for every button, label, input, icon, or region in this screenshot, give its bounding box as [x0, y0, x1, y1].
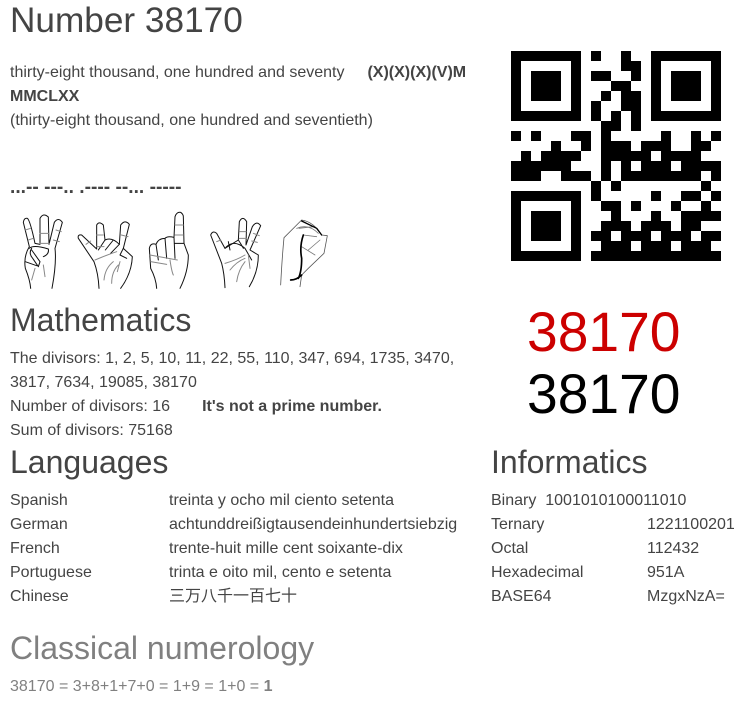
- hand sign: 3: [23, 215, 62, 288]
- informatics table: 112432: [647, 540, 699, 557]
- heading: Languages: Languages: [10, 444, 168, 480]
- informatics table: [491, 492, 735, 605]
- morse code: ...-- ---.. .---- --... -----: [10, 177, 182, 198]
- number in words and roman numeral: MMCLXX: [10, 88, 79, 105]
- languages table: Portuguese: [10, 564, 92, 581]
- hand sign: 0: [281, 220, 327, 287]
- languages table: [10, 492, 457, 605]
- informatics table: Hexadecimal: [491, 564, 583, 581]
- mathematics text: The divisors: 1, 2, 5, 10, 11, 22, 55, 110, 347, 694, 1735, 3470,: [10, 350, 454, 367]
- informatics table: Ternary: [491, 516, 544, 533]
- title: Number 38170: [10, 1, 243, 40]
- mathematics text: Number of divisors: 16 It's not a prime number.: [10, 398, 382, 415]
- sign language hands: [22, 212, 328, 289]
- mathematics text: Sum of divisors: 75168: [10, 422, 173, 439]
- informatics table: Binary 1001010100011010: [491, 492, 686, 509]
- hand sign: 1: [149, 212, 188, 288]
- heading: Classical numerology: Classical numerology: [10, 630, 314, 666]
- languages table: treinta y ocho mil ciento setenta: [169, 492, 394, 509]
- languages table: Spanish: [10, 492, 68, 509]
- heading: Mathematics: Mathematics: [10, 302, 191, 338]
- number in words and roman numeral: thirty-eight thousand, one hundred and seventy (X)(X)(X)(V)M: [10, 64, 466, 81]
- number in red: 38170: [527, 301, 680, 363]
- informatics table: BASE64: [491, 588, 551, 605]
- QR code: [511, 51, 721, 261]
- languages table: Chinese: [10, 588, 69, 605]
- languages table: German: [10, 516, 68, 533]
- hand sign: 7: [211, 218, 261, 288]
- languages table: French: [10, 540, 60, 557]
- numerology calculation: 38170 = 3+8+1+7+0 = 1+9 = 1+0 = 1: [10, 678, 272, 695]
- informatics table: Octal: [491, 540, 528, 557]
- hand sign: 8: [78, 222, 132, 288]
- number in words and roman numeral: [10, 64, 466, 129]
- heading: Informatics: Informatics: [491, 444, 647, 480]
- mathematics text: [10, 350, 454, 439]
- languages table: 三万八千一百七十: [169, 588, 297, 605]
- mathematics text: 3817, 7634, 19085, 38170: [10, 374, 197, 391]
- informatics table: 951A: [647, 564, 684, 581]
- number in words and roman numeral: (thirty-eight thousand, one hundred and seventieth): [10, 112, 373, 129]
- informatics table: 1221100201: [647, 516, 735, 533]
- languages table: trinta e oito mil, cento e setenta: [169, 564, 391, 581]
- languages table: achtunddreißigtausendeinhundertsiebzig: [169, 516, 457, 533]
- informatics table: MzgxNzA=: [647, 588, 725, 605]
- number in black: 38170: [527, 363, 680, 425]
- languages table: trente-huit mille cent soixante-dix: [169, 540, 403, 557]
